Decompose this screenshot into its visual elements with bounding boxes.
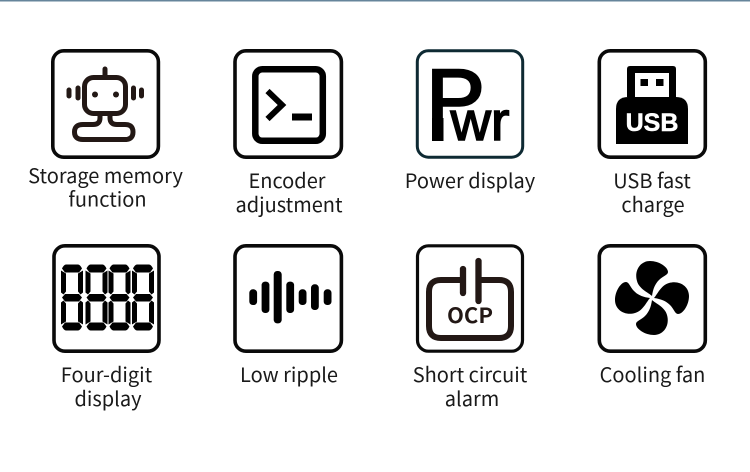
panel: low ripple: Low ripple (240, 359, 338, 388)
icon: USB stick: USB (626, 109, 678, 137)
panel: storage memory function (28, 51, 183, 212)
panel: short circuit alarm: alarm (445, 383, 499, 412)
panel: short circuit alarm (413, 246, 528, 412)
icon: sound wave (249, 271, 332, 323)
panel: power display: Power display (405, 165, 536, 194)
panel: encoder adjustment: adjustment (235, 189, 343, 218)
panel: four-digit display: Four-digit (61, 359, 153, 388)
panel: encoder adjustment (235, 51, 343, 218)
panel: USB fast charge: charge (621, 189, 685, 218)
panel: storage memory function: Storage memory (28, 160, 183, 189)
icon: OCP (429, 261, 511, 338)
panel: USB fast charge (599, 51, 705, 218)
panel: power display (405, 51, 536, 194)
icon: robot (69, 69, 142, 140)
panel: USB fast charge: USB fast (613, 165, 691, 194)
panel: four-digit display: display (74, 383, 142, 412)
icon: USB stick (616, 66, 688, 144)
icon: OCP: OCP (447, 300, 493, 330)
panel: cooling fan: Cooling fan (600, 359, 705, 388)
panel: encoder adjustment: Encoder (248, 165, 326, 194)
icon: terminal prompt (255, 69, 323, 141)
top edge bar (0, 0, 750, 2)
panel: storage memory function: function (68, 184, 147, 212)
icon: seven-segment digits (61, 264, 154, 330)
panel: cooling fan (599, 246, 705, 388)
icon: Pwr: P (426, 52, 485, 146)
panel: four-digit display (54, 246, 159, 412)
icon: Pwr: wr (449, 90, 510, 152)
panel: short circuit alarm: Short circuit (413, 359, 528, 388)
panel: low ripple (235, 246, 341, 388)
icon: Pwr (426, 52, 510, 152)
icon: fan (615, 261, 689, 335)
